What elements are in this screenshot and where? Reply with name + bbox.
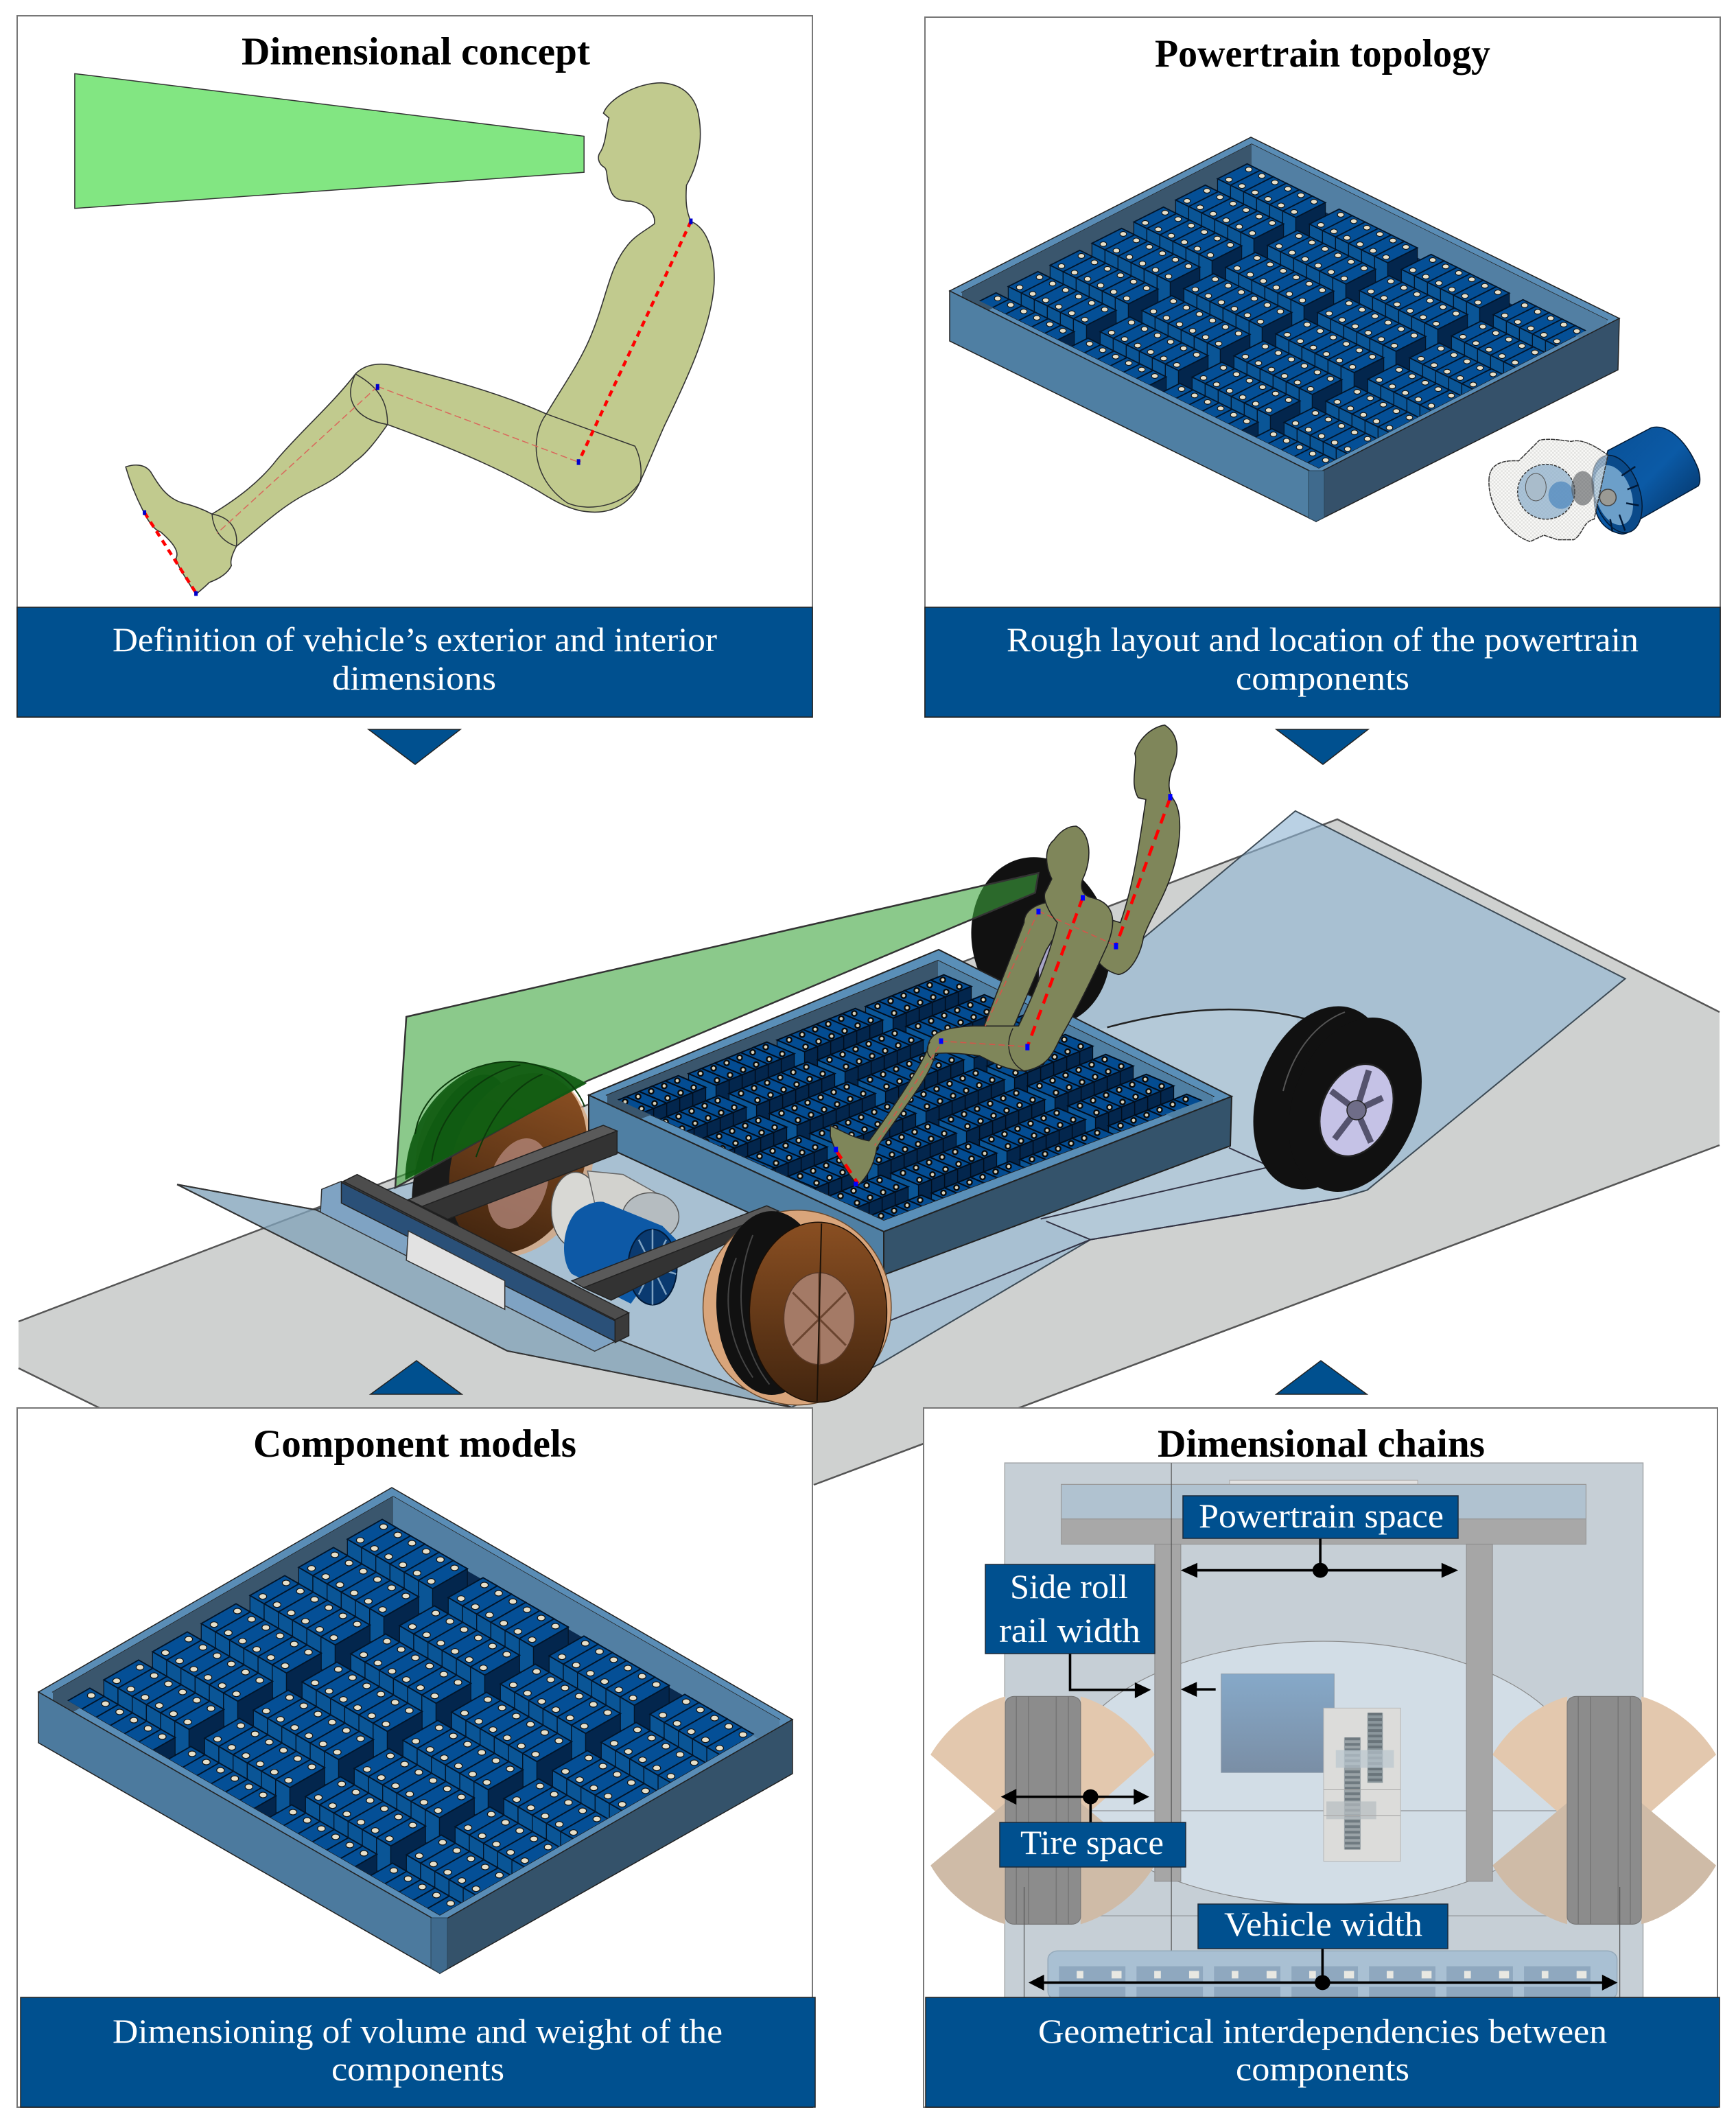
caption banner — [21, 1997, 815, 2107]
near rear wheel — [1229, 987, 1446, 1212]
caption line 2: components — [1236, 659, 1409, 697]
seated occupants — [830, 725, 1180, 1186]
battery tray — [950, 137, 1619, 521]
label: side roll rail width: Side roll — [1010, 1567, 1128, 1606]
title: Powertrain topology — [1155, 32, 1490, 75]
label: tire space: Tire space — [1020, 1823, 1164, 1862]
arrow down right — [1276, 729, 1368, 764]
motor and gearbox — [1489, 427, 1700, 541]
panel: dimensional chains — [924, 1408, 1720, 2107]
title: Dimensional chains — [1158, 1422, 1485, 1466]
panel frame — [17, 1408, 812, 2107]
panel frame — [924, 1408, 1717, 2107]
central vehicle assembly scene — [19, 725, 1720, 1510]
arrow up left — [371, 1361, 462, 1394]
caption banner — [925, 607, 1720, 717]
label: side roll rail width: rail width — [999, 1611, 1140, 1649]
chassis rails and front bumper — [320, 1125, 779, 1351]
caption line 1: Dimensioning of volume and weight of the — [113, 2012, 723, 2050]
label: side roll rail width — [985, 1564, 1155, 1654]
caption line 2: components — [331, 2050, 504, 2088]
label: powertrain space: Powertrain space — [1199, 1496, 1444, 1535]
top-view vehicle drawing — [930, 1463, 1716, 2000]
panel: dimensional concept — [17, 16, 812, 717]
panel frame — [17, 16, 812, 717]
caption banner — [17, 607, 812, 717]
caption line 1: Rough layout and location of the powertrain — [1007, 620, 1639, 659]
caption line 2: components — [1236, 2050, 1409, 2088]
floor plane — [19, 819, 1720, 1510]
caption line 2: dimensions — [332, 659, 496, 697]
left rear wheel — [390, 1038, 619, 1281]
panel frame — [925, 17, 1720, 717]
caption banner — [926, 1997, 1720, 2107]
far rear wheel — [954, 842, 1128, 1041]
panel: powertrain topology — [925, 17, 1720, 717]
label: tire space — [1000, 1822, 1186, 1867]
battery tray — [38, 1488, 793, 1973]
illustration: sight cone and driver — [75, 73, 714, 596]
dimension arrows — [1001, 1538, 1617, 1991]
label: vehicle width: Vehicle width — [1224, 1905, 1422, 1943]
label: vehicle width — [1198, 1904, 1448, 1949]
arrow up right — [1276, 1361, 1367, 1394]
battery tray, assembled — [589, 950, 1232, 1276]
caption line 1: Geometrical interdependencies between — [1038, 2012, 1607, 2050]
title: Dimensional concept — [242, 30, 590, 73]
green field-of-view plane — [395, 873, 1038, 1188]
caption line 1: Definition of vehicle’s exterior and interior — [113, 620, 717, 659]
arrow down left — [368, 729, 460, 764]
title: Component models — [253, 1422, 576, 1466]
translucent body planes — [177, 811, 1626, 1407]
panel: component models — [17, 1408, 815, 2107]
electric motor and gearbox, assembled — [551, 1171, 679, 1305]
front wheel — [703, 1210, 891, 1405]
